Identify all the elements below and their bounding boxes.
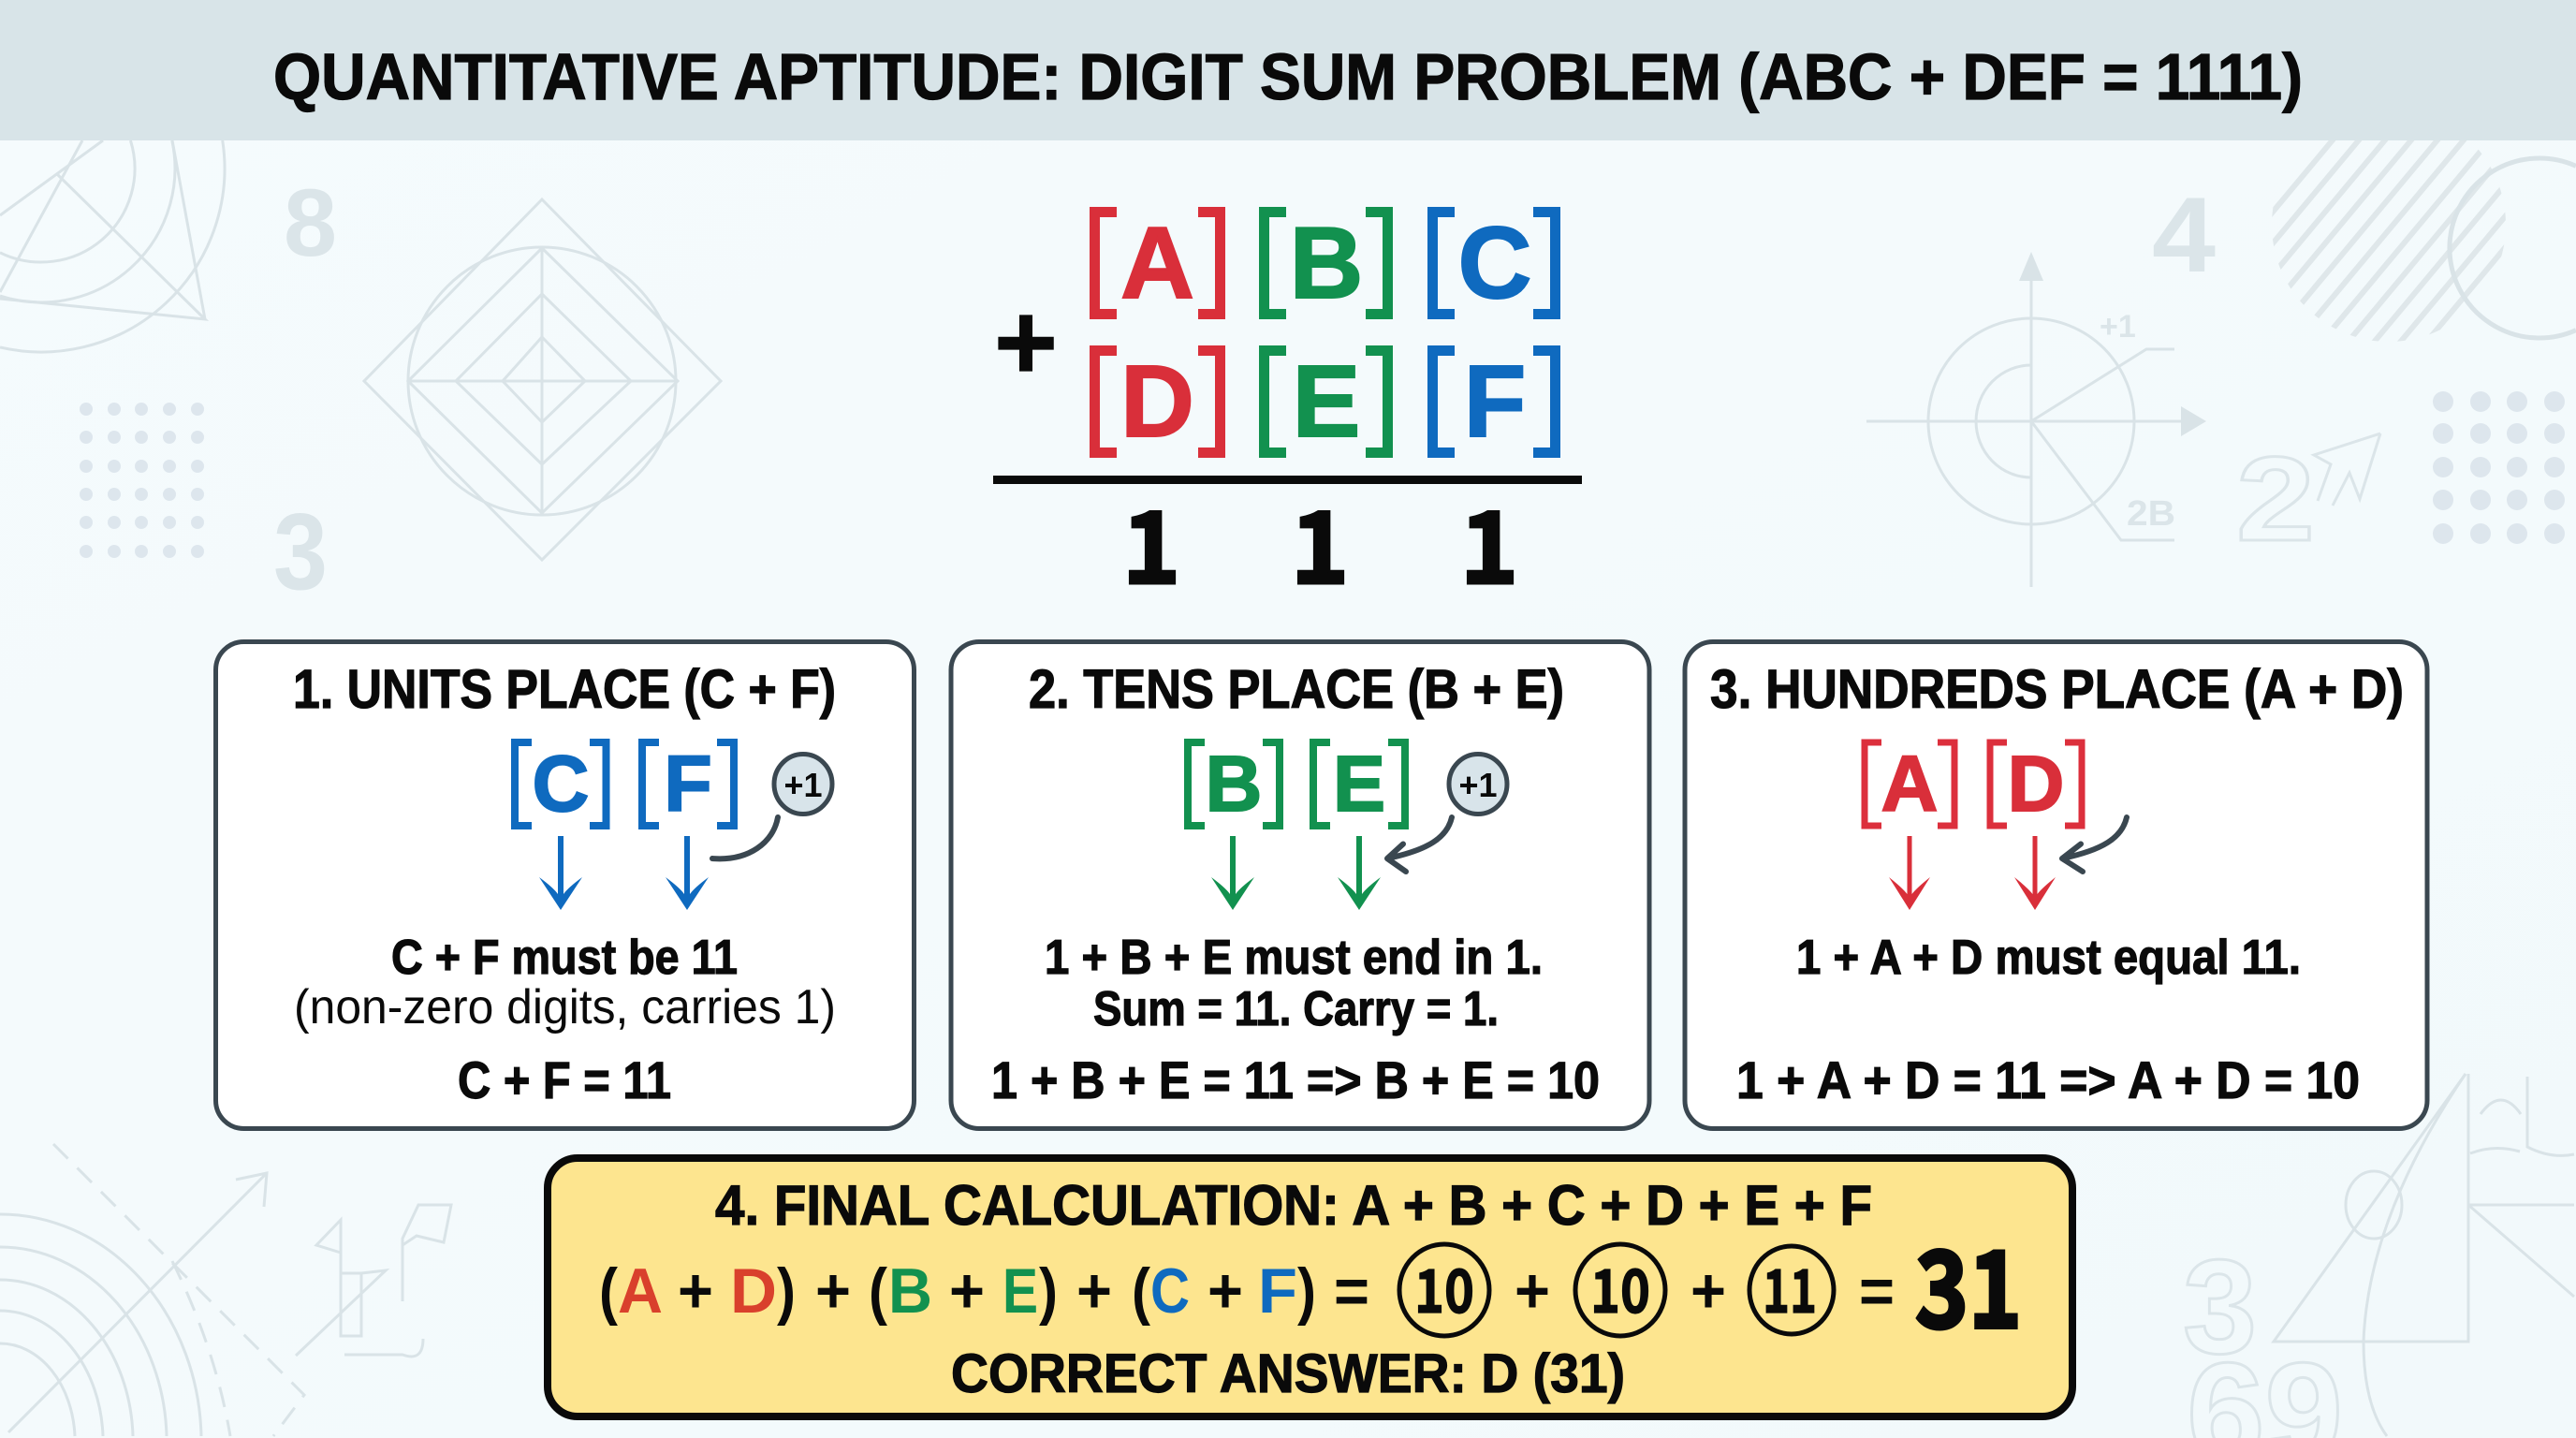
grouped sum expression — [599, 1255, 1369, 1327]
background decoration: top-left geometry — [0, 140, 225, 352]
panel 2 equation: 1 + B + E = 11 => B + E = 10 — [991, 1050, 1600, 1109]
background decoration: outlined 2 with arrow: 2 — [2236, 433, 2315, 566]
panel: tens place — [951, 642, 1649, 1129]
background decoration: nested diamond and circle — [364, 199, 721, 560]
plus sign: + — [994, 281, 1058, 403]
background decoration: axes and circle diagram: 2B — [2127, 494, 2175, 534]
panel 3 explanation: 1 + A + D must equal 11. — [1796, 931, 2301, 985]
grouped sum expression: C — [1150, 1255, 1190, 1327]
carry arrow — [2062, 817, 2127, 872]
background decoration: hatched circle — [2273, 140, 2576, 341]
panel: hundreds place — [1685, 642, 2427, 1129]
top row: A B C: A — [1120, 206, 1194, 320]
panel: final calculation — [548, 1158, 2072, 1416]
result digits: 1 — [1460, 468, 1518, 612]
background decoration: axes and circle diagram — [1866, 252, 2206, 587]
grouped sum expression: ( — [1132, 1255, 1150, 1327]
background decoration: dot grid left — [80, 403, 204, 558]
panel 2 heading: 2. TENS PLACE (B + E) — [1029, 659, 1564, 720]
arrows down — [1889, 836, 2056, 910]
top row: A B C — [1095, 206, 1556, 320]
grouped sum expression: ) — [1297, 1255, 1316, 1327]
carry badge +1 — [774, 755, 832, 814]
background decoration: outlined 2 with arrow — [2236, 433, 2380, 566]
grouped sum expression: + — [815, 1255, 851, 1327]
panel 2 explanation: 1 + B + E must end in 1. — [1045, 931, 1543, 985]
digit boxes B and E: E — [1333, 740, 1385, 828]
result digits: 1 — [1122, 468, 1180, 612]
sum rule — [993, 476, 1582, 484]
panel 1 explanation: (non-zero digits, carries 1) — [294, 980, 836, 1034]
circled value 10 (B + E): 10 — [1590, 1244, 1650, 1330]
equals: = — [1859, 1255, 1895, 1327]
digit boxes A and D: D — [2008, 740, 2064, 828]
background decoration: bottom-left arcs and arrows — [0, 1144, 451, 1436]
grouped sum expression: + — [1208, 1255, 1243, 1327]
panel: units place — [215, 642, 914, 1129]
panel 2 explanation: Sum = 11. Carry = 1. — [1093, 982, 1499, 1036]
grouped sum expression: F — [1258, 1255, 1297, 1327]
digit boxes C and F — [515, 740, 734, 828]
digit boxes C and F: F — [664, 740, 712, 828]
circled value 10 (A + D): 10 — [1414, 1244, 1474, 1330]
background decoration: bottom-right triangle and numbers — [2183, 1074, 2574, 1438]
plus: + — [1515, 1255, 1550, 1327]
top row: A B C: C — [1458, 206, 1531, 320]
carry badge +1: +1 — [1458, 766, 1498, 804]
second row: D E F: D — [1120, 345, 1194, 459]
background decoration: axes and circle diagram: +1 — [2100, 309, 2136, 345]
carry badge +1: +1 — [783, 766, 823, 804]
arrows down — [539, 836, 709, 910]
background decoration: faded number 8: 8 — [284, 169, 337, 276]
grouped sum expression: A — [618, 1255, 663, 1327]
plus: + — [1690, 1255, 1726, 1327]
result digits: 1 — [1291, 468, 1349, 612]
grouped sum expression: + — [678, 1255, 713, 1327]
correct answer: CORRECT ANSWER: D (31) — [951, 1343, 1625, 1404]
carry badge +1 — [1449, 755, 1507, 814]
panel 2 explanation — [1045, 931, 1543, 1036]
background decoration: faded number 3: 3 — [273, 491, 328, 612]
panel 1 explanation: C + F must be 11 — [391, 931, 738, 985]
header band with title — [0, 0, 2576, 140]
result digits — [1122, 468, 1518, 612]
digit boxes C and F: C — [533, 740, 589, 828]
grouped sum expression: ) — [777, 1255, 796, 1327]
digit boxes B and E — [1188, 740, 1405, 828]
top row: A B C: B — [1290, 206, 1363, 320]
grouped sum expression: ( — [599, 1255, 618, 1327]
panel 3 heading: 3. HUNDREDS PLACE (A + D) — [1710, 659, 2404, 720]
background decoration: bottom-right triangle and numbers: 3 — [2183, 1233, 2257, 1382]
grouped sum expression: ) — [1039, 1255, 1058, 1327]
grouped sum expression: = — [1334, 1255, 1369, 1327]
grouped sum expression: D — [730, 1255, 777, 1327]
panel 3 equation: 1 + A + D = 11 => A + D = 10 — [1736, 1050, 2360, 1109]
grouped sum expression: B — [888, 1255, 932, 1327]
grouped sum expression: + — [949, 1255, 985, 1327]
circled value 11 (C + F): 11 — [1763, 1244, 1817, 1330]
carry curve — [712, 817, 778, 858]
second row: D E F: E — [1293, 345, 1360, 459]
digit boxes B and E: B — [1206, 740, 1262, 828]
second row: D E F: F — [1464, 345, 1526, 459]
main addition problem — [993, 206, 1582, 612]
total 31: 31 — [1915, 1205, 2022, 1358]
background decoration: faded number 4: 4 — [2152, 176, 2216, 295]
arrows down — [1211, 836, 1381, 910]
title: QUANTITATIVE APTITUDE: DIGIT SUM PROBLEM (ABC + DEF = 1111) — [273, 40, 2303, 113]
grouped sum expression: E — [1003, 1255, 1038, 1327]
carry arrow — [1387, 817, 1452, 872]
final heading: 4. FINAL CALCULATION: A + B + C + D + E + F — [715, 1174, 1872, 1237]
background decoration: dot grid right — [2433, 391, 2565, 544]
grouped sum expression: + — [1076, 1255, 1112, 1327]
panel 1 heading: 1. UNITS PLACE (C + F) — [293, 659, 836, 720]
panel 1 explanation — [294, 931, 836, 1034]
second row: D E F — [1095, 345, 1556, 459]
panel 1 equation: C + F = 11 — [458, 1050, 671, 1109]
grouped sum expression: ( — [869, 1255, 887, 1327]
digit boxes A and D — [1865, 740, 2082, 828]
digit boxes A and D: A — [1881, 740, 1938, 828]
